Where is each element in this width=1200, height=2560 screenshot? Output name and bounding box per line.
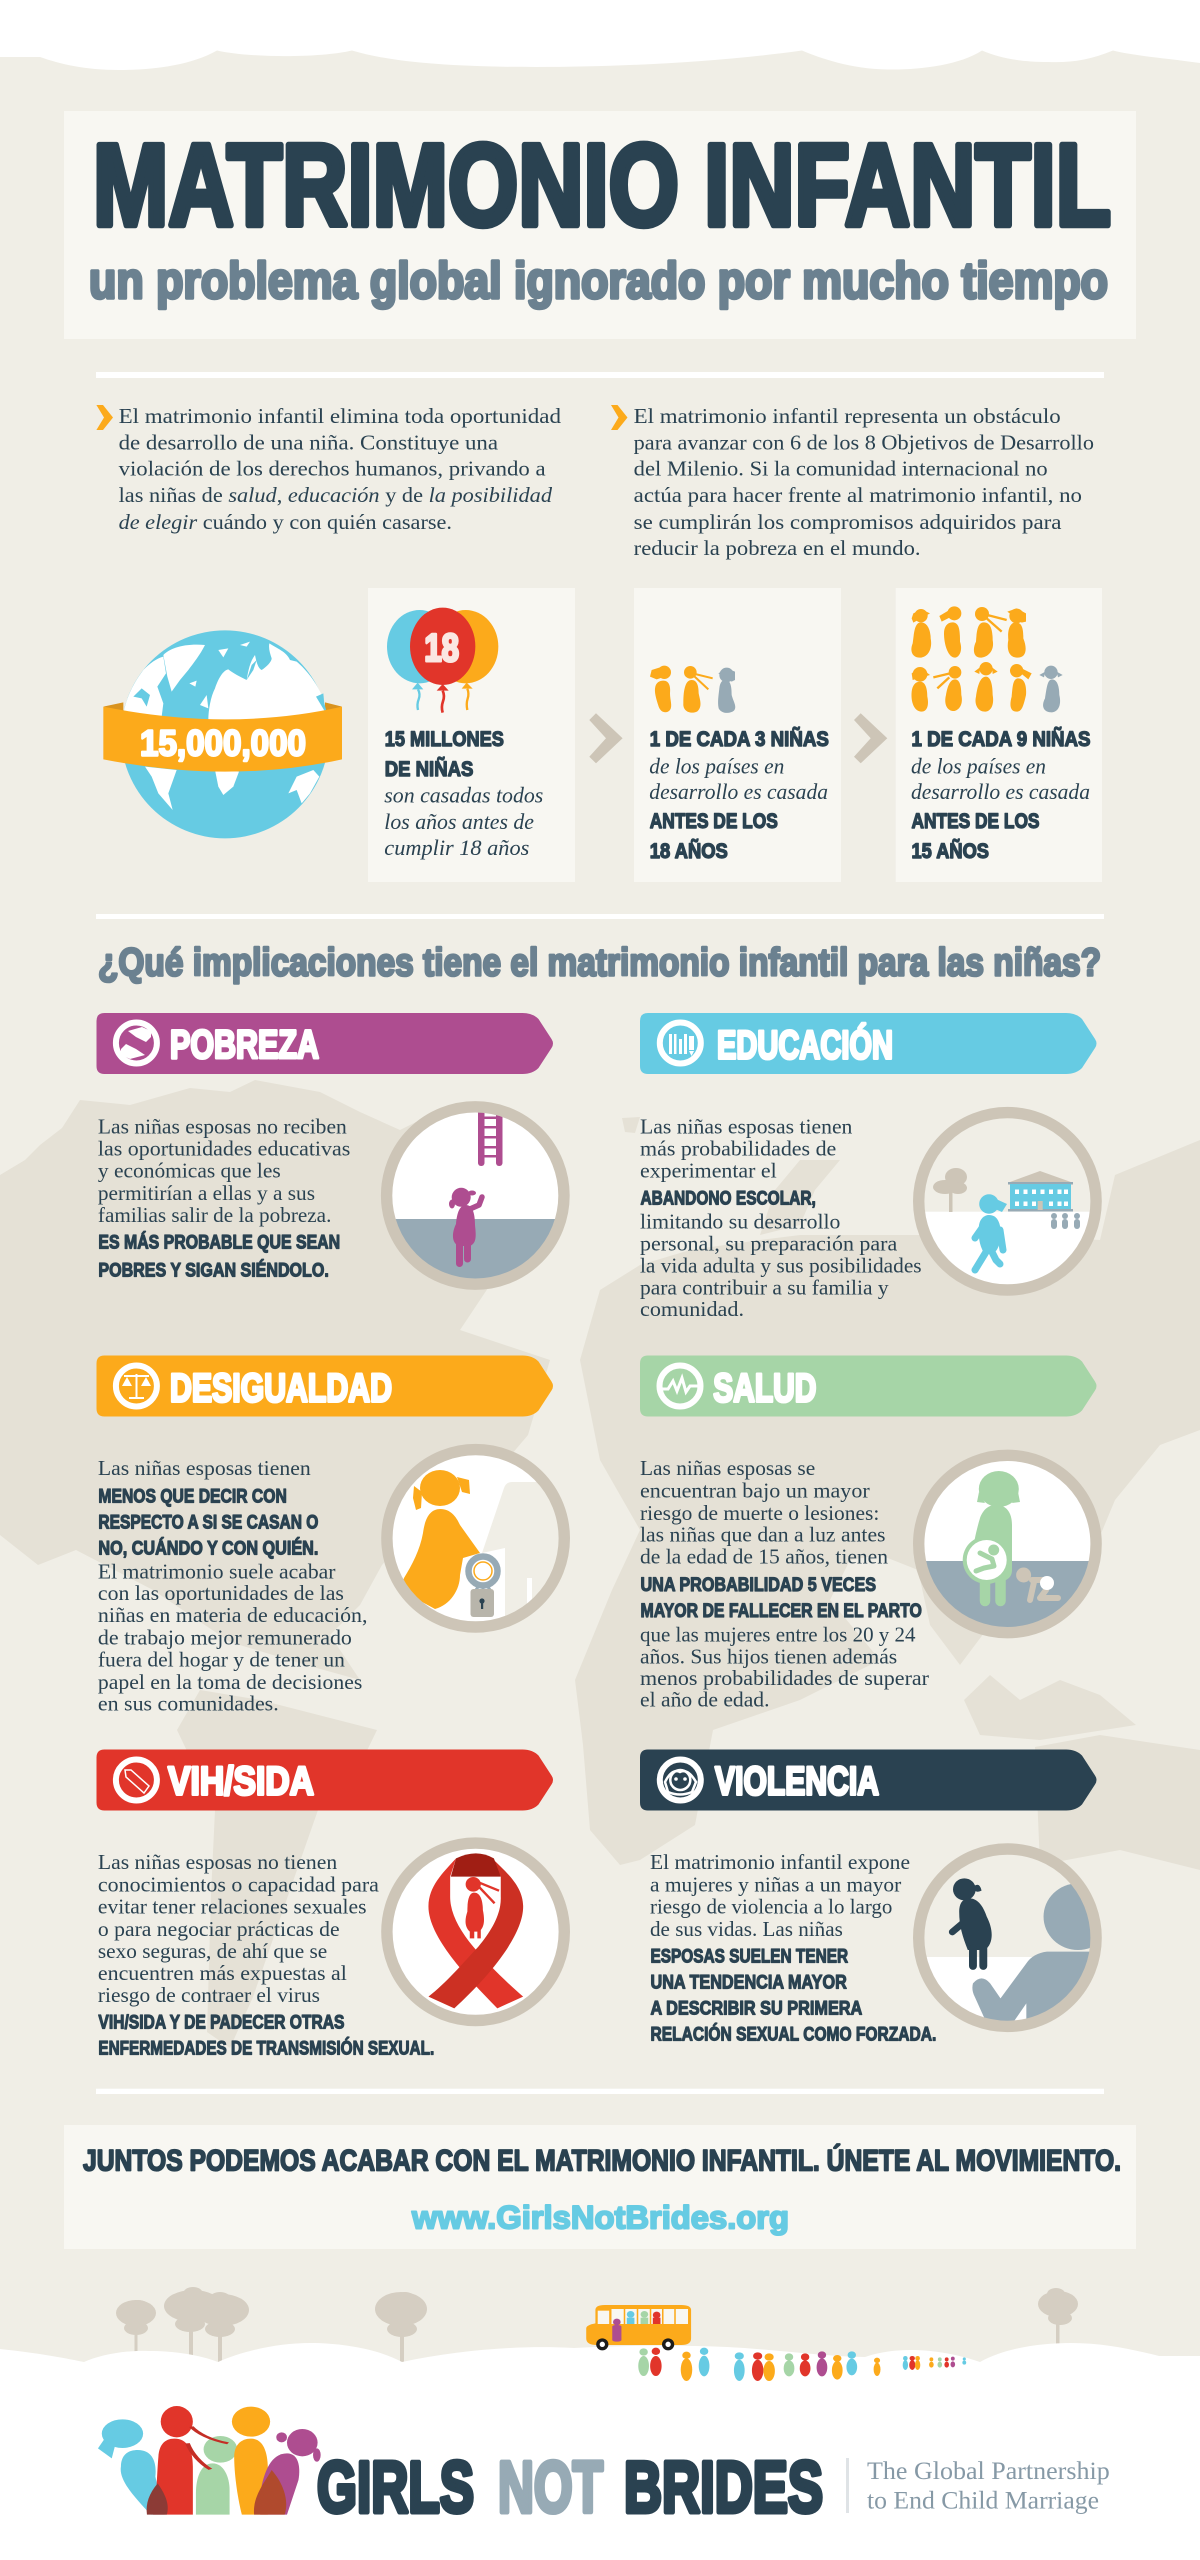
panel: 15 millones: cumplir 18 años (384, 835, 529, 860)
panel: desigualdad (96, 1356, 565, 1716)
text: experimentar el (640, 1159, 777, 1183)
text (98, 1850, 434, 2060)
icon: balloons (387, 608, 498, 713)
text: RESPECTO A SI SE CASAN O (98, 1512, 318, 1534)
text: la vida adulta y sus posibilidades (640, 1254, 922, 1278)
text (98, 1114, 350, 1282)
text: personal, su preparación para (640, 1232, 898, 1256)
number: 15,000,000: 15,000,000 (140, 722, 306, 764)
text: de trabajo mejor remunerado (98, 1625, 352, 1649)
text: conocimientos o capacidad para (98, 1872, 379, 1896)
panel: 1 de cada 9: 15 AÑOS (912, 838, 989, 863)
panel: 15 millones: los años antes de (384, 809, 534, 834)
globe with banner (103, 630, 342, 838)
logo: girls not brides: BRIDES (624, 2448, 823, 2528)
text: riesgo de violencia a lo largo (650, 1895, 892, 1919)
logo tagline: The Global Partnership (867, 2458, 1110, 2485)
bottom white hills (0, 2343, 1200, 2560)
illustration: girl leaving school (910, 1113, 1110, 1292)
panel: desigualdad: DESIGUALDAD (170, 1366, 392, 1410)
panel: 1 de cada 9 (896, 588, 1102, 882)
icon: heartbeat (660, 1366, 700, 1406)
text: El matrimonio suele acabar (98, 1559, 336, 1583)
intro text right (611, 404, 1094, 560)
text: comunidad. (640, 1297, 744, 1321)
panel: 1 de cada 3: 1 DE CADA 3 NIÑAS (650, 726, 829, 751)
text: con las oportunidades de las (98, 1581, 344, 1605)
text: ES MÁS PROBABLE QUE SEAN (98, 1231, 340, 1254)
logo: girls not brides: NOT (498, 2448, 603, 2528)
intro text left (96, 404, 561, 534)
text: MAYOR DE FALLECER EN EL PARTO (640, 1600, 922, 1622)
intro text left: de elegir cuándo y con quién casarse. (119, 510, 452, 534)
panel: salud: SALUD (713, 1366, 816, 1410)
intro text right: del Milenio. Si la comunidad internacional no (634, 457, 1048, 481)
text: Las niñas esposas tienen (640, 1114, 853, 1138)
text: ABANDONO ESCOLAR, (640, 1188, 816, 1210)
intro text right: para avanzar con 6 de los 8 Objetivos de Desarrollo (634, 431, 1094, 455)
text: que las mujeres entre los 20 y 24 (640, 1623, 916, 1647)
panel: pobreza: POBREZA (170, 1023, 319, 1067)
panel: violencia (640, 1750, 1112, 2046)
icon: book and pencil (660, 1022, 701, 1064)
illustration: girl and adult (910, 1849, 1112, 2037)
panel: 1 de cada 9: de los países en (911, 753, 1046, 778)
icon: condom (116, 1760, 157, 1800)
intro text right: El matrimonio infantil representa un obstáculo (634, 404, 1061, 428)
text: familias salir de la pobreza. (98, 1203, 331, 1227)
panel: vih/sida: VIH/SIDA (168, 1760, 314, 1804)
logo: girls not brides: to End Child Marriage (867, 2487, 1099, 2514)
panel: educacion (640, 1013, 1110, 1321)
text: o para negociar prácticas de (98, 1917, 340, 1941)
text: riesgo de contraer el virus (98, 1983, 320, 2007)
intro text left: las niñas de salud, educación y de la posibilidad (119, 483, 552, 507)
text: a mujeres y niñas a un mayor (650, 1872, 901, 1896)
intro text left: violación de los derechos humanos, privando a (119, 457, 546, 481)
text: Las niñas esposas no reciben (98, 1114, 347, 1138)
banner (640, 1750, 1096, 1810)
panel: 1 de cada 3: 18 AÑOS (650, 838, 728, 863)
illustration: ribbon (387, 1843, 564, 2021)
panel: pobreza (96, 1013, 570, 1289)
text: MENOS QUE DECIR CON (98, 1486, 287, 1508)
text: El matrimonio infantil expone (650, 1850, 910, 1874)
text: fuera del hogar y de tener un (98, 1648, 345, 1672)
text: POBRES Y SIGAN SIÉNDOLO. (98, 1259, 329, 1282)
panel: 1 de cada 9: desarrollo es casada (911, 779, 1090, 804)
text: limitando su desarrollo (640, 1209, 840, 1233)
banner (96, 1356, 553, 1416)
text: papel en la toma de decisiones (98, 1670, 362, 1694)
panel: 15 millones (368, 588, 575, 882)
text: de la edad de 15 años, tienen (640, 1545, 888, 1569)
text: las oportunidades educativas (98, 1137, 350, 1161)
icon: three girls (650, 666, 735, 713)
text: Las niñas esposas tienen (98, 1456, 311, 1480)
icon: balloons: 18 (424, 626, 459, 670)
text: permitirían a ellas y a sus (98, 1181, 315, 1205)
top white wave (0, 0, 1200, 70)
text: encuentren más expuestas al (98, 1961, 347, 1985)
panel: 1 de cada 9: ANTES DE LOS (912, 809, 1040, 833)
arrow (854, 713, 887, 763)
banner (640, 1356, 1096, 1416)
text (640, 1456, 929, 1712)
text: el año de edad. (640, 1688, 770, 1712)
logo wordmark: GIRLS (317, 2448, 474, 2528)
icon: scales (116, 1366, 157, 1406)
text: ENFERMEDADES DE TRANSMISIÓN SEXUAL. (98, 2036, 434, 2060)
bus (586, 2305, 691, 2350)
text: más probabilidades de (640, 1137, 836, 1161)
text: las niñas que dan a luz antes (640, 1523, 886, 1547)
panel: 15 millones: son casadas todos (384, 783, 543, 808)
logo: girls not brides (98, 2406, 1110, 2528)
world map background (0, 1080, 1200, 2048)
panel: call to action: www.GirlsNotBrides.org (411, 2200, 789, 2236)
text: Las niñas esposas no tienen (98, 1850, 337, 1874)
text: VIH/SIDA Y DE PADECER OTRAS (98, 2012, 345, 2034)
text: para contribuir a su familia y (640, 1275, 889, 1299)
text: sexo seguras, de ahí que se (98, 1939, 327, 1963)
panel: 1 de cada 3: desarrollo es casada (649, 779, 828, 804)
trees (116, 2287, 1078, 2363)
logo figures (98, 2406, 321, 2515)
text: RELACIÓN SEXUAL COMO FORZADA. (650, 2022, 936, 2046)
icon: face (660, 1760, 701, 1800)
text: Las niñas esposas se (640, 1456, 815, 1480)
banner (96, 1013, 553, 1074)
text (650, 1850, 936, 2046)
panel: 1 de cada 3: de los países en (649, 753, 784, 778)
text: UNA TENDENCIA MAYOR (650, 1972, 847, 1994)
panel: title (64, 111, 1136, 339)
text (98, 1456, 368, 1716)
intro text right: reducir la pobreza en el mundo. (634, 536, 921, 560)
text: NO, CUÁNDO Y CON QUIÉN. (98, 1537, 318, 1560)
line of girls (638, 2348, 966, 2381)
text: menos probabilidades de superar (640, 1666, 929, 1690)
text (640, 1114, 922, 1321)
illustration: pregnant girl and baby (910, 1455, 1110, 1641)
text: riesgo de muerte o lesiones: (640, 1501, 879, 1525)
text: A DESCRIBIR SU PRIMERA (650, 1998, 862, 2020)
panel: violencia: VIOLENCIA (715, 1760, 879, 1804)
intro text right: actúa para hacer frente al matrimonio infantil, no (634, 483, 1082, 507)
text: encuentran bajo un mayor (640, 1478, 870, 1502)
icon: hands (116, 1022, 157, 1064)
icon: nine girls (911, 606, 1063, 712)
text: años. Sus hijos tienen además (640, 1644, 897, 1668)
panel: 1 de cada 3: ANTES DE LOS (650, 809, 778, 833)
panel: 1 de cada 3 (634, 588, 841, 882)
panel: salud (640, 1356, 1110, 1712)
arrow (589, 713, 623, 763)
text: niñas en materia de educación, (98, 1603, 368, 1627)
panel: call to action (64, 2125, 1136, 2249)
intro text right: se cumplirán los compromisos adquiridos para (634, 510, 1062, 534)
text: UNA PROBABILIDAD 5 VECES (640, 1574, 876, 1596)
panel: 1 de cada 9: 1 DE CADA 9 NIÑAS (912, 726, 1090, 751)
text: de sus vidas. Las niñas (650, 1917, 843, 1941)
intro text left: de desarrollo de una niña. Constituye una (119, 431, 498, 455)
panel: vih/sida (96, 1750, 564, 2060)
illustration: chained girl (387, 1450, 565, 1627)
text: en sus comunidades. (98, 1692, 279, 1716)
text: y económicas que les (98, 1159, 281, 1183)
text: ESPOSAS SUELEN TENER (650, 1946, 848, 1968)
panel: 15 millones: 15 MILLONES (385, 727, 504, 751)
intro text left: El matrimonio infantil elimina toda oportunidad (119, 404, 561, 428)
banner (640, 1013, 1096, 1074)
panel: educacion: EDUCACIÓN (717, 1022, 893, 1068)
illustration: girl and ladder (380, 1105, 570, 1289)
panel: 15 millones: DE NIÑAS (385, 756, 473, 781)
banner (96, 1750, 553, 1810)
text: evitar tener relaciones sexuales (98, 1895, 367, 1919)
